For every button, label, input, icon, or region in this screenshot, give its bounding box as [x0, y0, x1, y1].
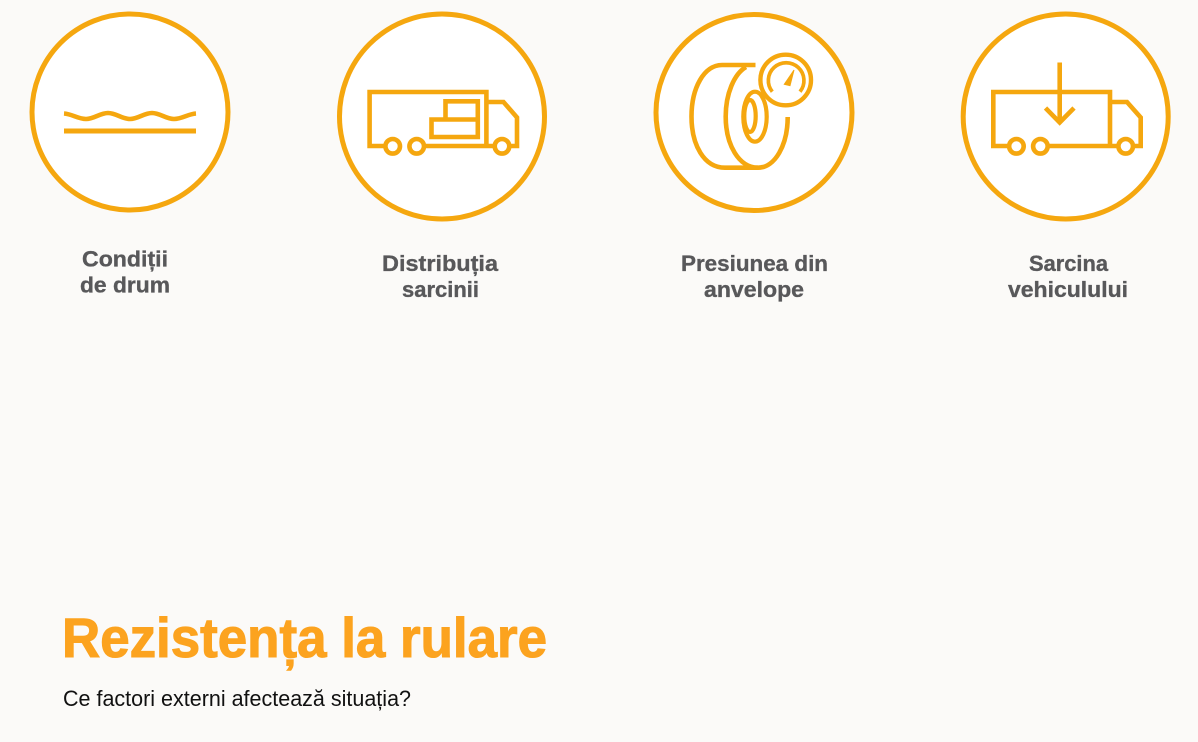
icon: tyre with pressure gauge in circle	[656, 14, 852, 210]
subtitle: Ce factori externi afectează situația?	[63, 686, 411, 711]
label: road conditions: Condiții	[82, 246, 168, 272]
panel: vehicle load	[963, 14, 1168, 302]
panel: tyre pressure	[656, 14, 852, 302]
icon: truck with boxes in circle	[340, 14, 544, 219]
label: tyre pressure	[681, 251, 828, 302]
label: load distribution: sarcinii	[402, 277, 479, 302]
icon: truck with down arrow in circle	[963, 14, 1168, 219]
icon: road surface in circle	[32, 14, 228, 210]
label: tyre pressure: anvelope	[704, 277, 804, 302]
label: vehicle load: Sarcina	[1029, 251, 1109, 276]
label: vehicle load: vehiculului	[1008, 277, 1128, 302]
label: load distribution	[382, 251, 499, 302]
label: vehicle load	[1008, 251, 1128, 302]
label: load distribution: Distribuția	[382, 251, 499, 276]
panel: road conditions	[32, 14, 228, 298]
label: road conditions	[80, 246, 170, 298]
label: tyre pressure: Presiunea din	[681, 251, 828, 276]
title: Rezistența la rulare	[62, 606, 547, 670]
panel: load distribution	[340, 14, 544, 302]
label: road conditions: de drum	[80, 272, 170, 298]
